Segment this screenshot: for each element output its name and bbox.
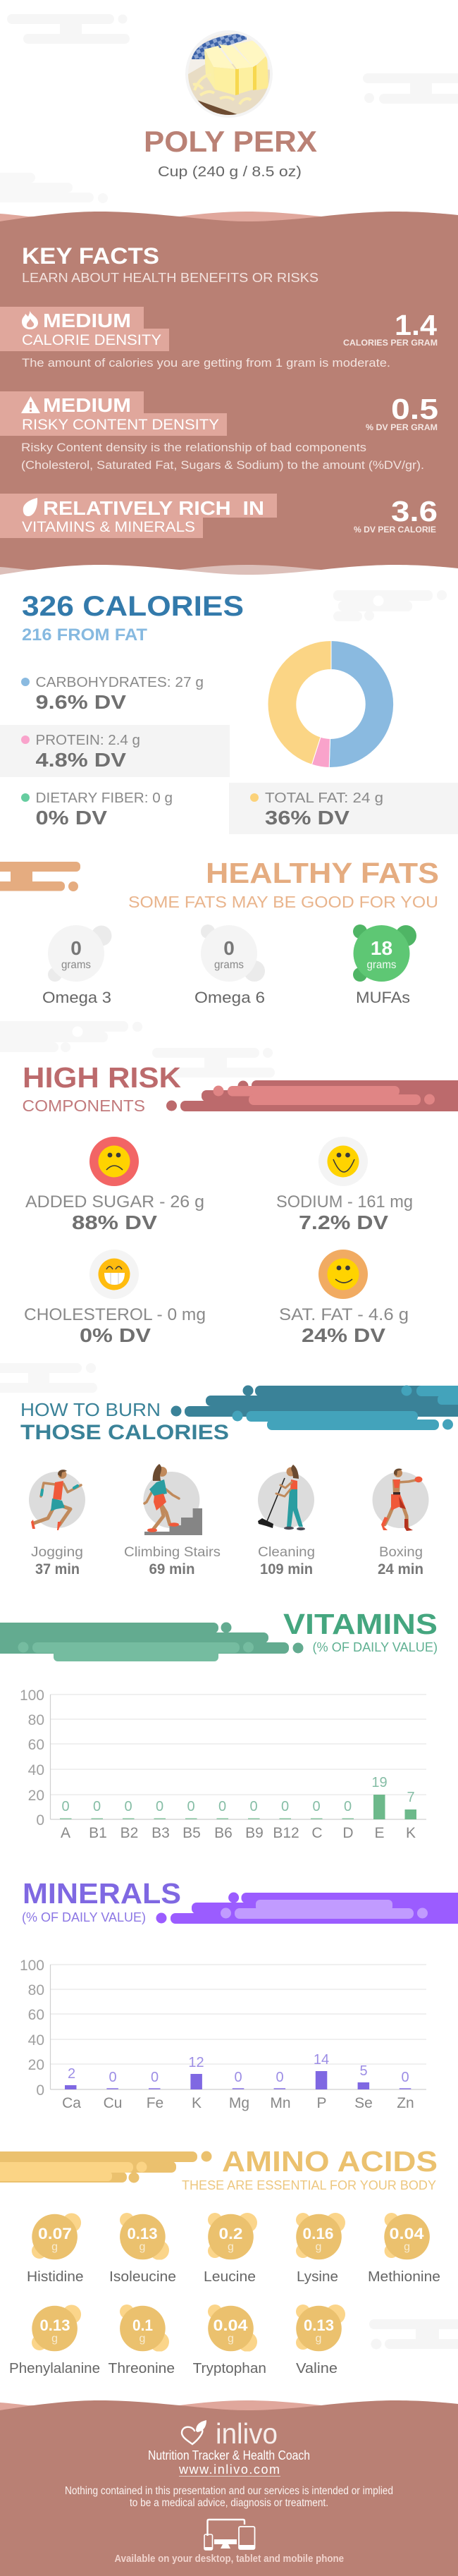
availability note: Available on your desktop, tablet and mobile phone — [114, 2553, 344, 2565]
amino acid: tryptophan — [193, 2305, 266, 2376]
subheading: minerals daily value: (% OF DAILY VALUE) — [22, 1910, 146, 1924]
background cloud: above high risk left — [0, 1021, 142, 1052]
bar chart: minerals: 12 — [188, 2055, 204, 2070]
amino acid: methionine — [368, 2213, 440, 2285]
amino acid: leucine: g — [228, 2241, 234, 2253]
macro: total fat: 36% DV — [265, 807, 349, 829]
macro: carbohydrates — [21, 675, 204, 713]
amino acid: valine: 0.13 — [304, 2316, 334, 2334]
amino acid: lysine — [296, 2213, 345, 2285]
bar chart: vitamins: 20 — [28, 1788, 44, 1804]
decoration: minerals stripes — [156, 1893, 458, 1924]
fact: risky content density: % DV PER GRAM — [366, 422, 438, 432]
serving size: Cup (240 g / 8.5 oz) — [158, 164, 302, 180]
amino acid: isoleucine: 0.13 — [127, 2225, 158, 2242]
activity: climbing stairs: Climbing Stairs — [124, 1545, 221, 1560]
bar chart: minerals: 80 — [28, 1982, 44, 1998]
fat badge: MUFAs: 18 — [371, 937, 392, 959]
bar chart: vitamins: 0 — [312, 1799, 321, 1814]
component: cholesterol: 0% DV — [80, 1324, 151, 1346]
macro: total fat: TOTAL FAT: 24 g — [265, 790, 383, 806]
bar chart: minerals: 2 — [68, 2066, 75, 2082]
panel: key facts — [0, 212, 458, 593]
bar chart: vitamins: B5 — [182, 1825, 201, 1841]
bar chart: minerals: 0 — [36, 2082, 44, 2099]
component: sodium: 7.2% DV — [299, 1211, 388, 1233]
macro: protein: PROTEIN: 2.4 g — [35, 733, 140, 748]
fact: vitamins and minerals: 3.6 — [391, 495, 438, 527]
bar chart: vitamins: 80 — [28, 1712, 44, 1728]
bar chart: vitamins: A — [61, 1825, 70, 1841]
disclaimer: Nothing contained in this presentation and our services is intended or implied — [65, 2485, 393, 2497]
bar chart: vitamins: B6 — [214, 1825, 233, 1841]
fact: calorie density: CALORIE DENSITY — [22, 332, 161, 348]
bar chart: minerals: 5 — [359, 2063, 368, 2079]
fact: calorie density: MEDIUM — [43, 310, 131, 331]
disclaimer — [65, 2485, 393, 2509]
bar chart: vitamins: 19 — [371, 1775, 388, 1790]
bar chart: vitamins: B9 — [245, 1825, 264, 1841]
bar chart: minerals: 0 — [234, 2070, 242, 2085]
activity: boxing — [372, 1468, 428, 1577]
amino acid: phenylalanine: Phenylalanine — [9, 2361, 100, 2376]
donut chart — [268, 640, 394, 768]
amino acid: tryptophan: g — [228, 2333, 234, 2345]
website link: www.inlivo.com — [178, 2462, 280, 2477]
bar chart: minerals: Fe — [147, 2095, 163, 2111]
macro: total fat — [229, 783, 458, 834]
bar chart: minerals: 100 — [20, 1958, 44, 1974]
bar chart: minerals: 60 — [28, 2007, 44, 2023]
bar chart: vitamins: 40 — [28, 1762, 44, 1778]
decoration: high risk stripes — [166, 1080, 458, 1111]
bar chart: minerals — [20, 1958, 426, 2111]
bar chart: vitamins: E — [374, 1825, 385, 1841]
fact: risky content density: MEDIUM — [43, 394, 131, 416]
amino acid: valine: g — [316, 2333, 321, 2345]
component: added sugar — [25, 1137, 204, 1233]
background cloud: above burn section — [0, 1363, 97, 1393]
bar chart: minerals: 40 — [28, 2032, 44, 2049]
fact: vitamins and minerals: RELATIVELY RICH IN — [43, 497, 264, 519]
heading: healthy fats: HEALTHY FATS — [206, 857, 439, 889]
bar chart: vitamins: B1 — [89, 1825, 107, 1841]
bar chart: minerals: 0 — [401, 2070, 409, 2085]
component: sodium: SODIUM - 161 mg — [276, 1192, 413, 1211]
amino acid: leucine — [204, 2213, 257, 2285]
amino acid: histidine: 0.07 — [38, 2225, 72, 2242]
fat badge: omega 6: 0 — [223, 937, 235, 959]
heading: calories: 326 CALORIES — [22, 591, 244, 622]
amino acid: threonine: g — [140, 2333, 145, 2345]
component: cholesterol: CHOLESTEROL - 0 mg — [24, 1305, 206, 1324]
background cloud: above high risk center — [152, 1048, 275, 1078]
bar chart: vitamins: 0 — [249, 1799, 258, 1814]
bar chart: minerals: 0 — [109, 2070, 117, 2085]
amino acid: isoleucine: Isoleucine — [109, 2269, 176, 2285]
amino acid: methionine: 0.04 — [389, 2225, 424, 2242]
amino acid: valine: Valine — [296, 2361, 338, 2376]
bar chart: minerals: K — [192, 2095, 202, 2111]
amino acid: tryptophan: 0.04 — [213, 2316, 248, 2334]
fact: calorie density — [0, 307, 438, 370]
amino acid: phenylalanine: g — [51, 2333, 58, 2345]
bar chart: vitamins: B3 — [151, 1825, 170, 1841]
amino acid: methionine: g — [404, 2241, 410, 2253]
bar chart: vitamins: 60 — [28, 1737, 44, 1753]
component: added sugar: ADDED SUGAR - 26 g — [25, 1192, 204, 1211]
fat badge: omega 6: Omega 6 — [194, 989, 265, 1006]
activity: climbing stairs: 69 min — [149, 1561, 194, 1577]
bar chart: vitamins: 0 — [36, 1812, 44, 1829]
fat badge: omega 3: 0 — [70, 937, 82, 959]
bar chart: minerals: Se — [354, 2095, 373, 2111]
bar chart: vitamins: D — [342, 1825, 354, 1841]
icon: devices — [204, 2520, 255, 2550]
subheading: key facts: LEARN ABOUT HEALTH BENEFITS OR RISKS — [22, 270, 318, 285]
fat badge: MUFAs: grams — [366, 959, 397, 971]
activity: boxing: 24 min — [378, 1561, 423, 1577]
fact: calorie density: 1.4 — [395, 309, 437, 341]
fact: risky content density: (Cholesterol, Saturated Fat, Sugars & Sodium) to the amount (%DV/gr). — [21, 458, 424, 472]
amino acid: histidine: g — [51, 2241, 58, 2253]
bar chart: vitamins: 0 — [218, 1799, 226, 1814]
macro: protein: 4.8% DV — [35, 749, 126, 771]
decoration: healthy fats stripes — [0, 862, 80, 891]
fat badge: omega 3: Omega 3 — [42, 989, 111, 1006]
fact: vitamins and minerals: % DV PER CALORIE — [354, 525, 436, 535]
logo: inlivo — [182, 2417, 278, 2450]
activity: jogging: Jogging — [31, 1545, 83, 1560]
heading: key facts: KEY FACTS — [22, 243, 159, 269]
fat badge: omega 3 — [42, 925, 111, 1006]
bar chart: vitamins: K — [406, 1825, 416, 1841]
amino acid: threonine: 0.1 — [132, 2316, 153, 2334]
fact: calorie density: The amount of calories you are getting from 1 gram is moderate. — [22, 356, 390, 370]
amino acid: histidine — [27, 2213, 84, 2285]
amino acid: methionine: Methionine — [368, 2269, 440, 2285]
activity: climbing stairs — [124, 1464, 221, 1577]
subheading: calories from fat: 216 FROM FAT — [22, 625, 147, 645]
subheading: healthy fats: SOME FATS MAY BE GOOD FOR YOU — [128, 893, 438, 911]
bar chart: vitamins: B12 — [273, 1825, 299, 1841]
fact: risky content density: RISKY CONTENT DENSITY — [22, 417, 219, 433]
bar chart: vitamins: 100 — [20, 1687, 44, 1704]
amino acid: isoleucine — [109, 2213, 176, 2285]
amino acid: leucine: Leucine — [204, 2269, 256, 2285]
amino acid: lysine: Lysine — [297, 2269, 338, 2285]
fact: risky content density: 0.5 — [391, 393, 438, 425]
amino acid: phenylalanine — [9, 2305, 100, 2376]
amino acid: threonine: Threonine — [109, 2361, 175, 2376]
fat badge: MUFAs: MUFAs — [356, 989, 410, 1006]
bar chart: vitamins: 0 — [61, 1799, 70, 1814]
macro: protein — [0, 725, 230, 777]
subheading: amino acids: THESE ARE ESSENTIAL FOR YOUR BODY — [182, 2178, 436, 2192]
component: cholesterol — [24, 1250, 206, 1346]
background cloud: calories — [333, 590, 447, 621]
heading: amino acids: AMINO ACIDS — [222, 2145, 438, 2178]
panel: how to burn those calories — [20, 1399, 428, 1577]
macro: dietary fiber: DIETARY FIBER: 0 g — [35, 790, 173, 806]
subheading: vitamins daily value: (% OF DAILY VALUE) — [313, 1640, 438, 1654]
title: POLY PERX — [144, 125, 317, 158]
bar chart: vitamins: 7 — [407, 1790, 415, 1805]
bar chart: minerals: Mg — [229, 2095, 249, 2111]
amino acid: phenylalanine: 0.13 — [39, 2316, 70, 2334]
heading: how to burn: HOW TO BURN — [20, 1399, 161, 1420]
fact: calorie density: CALORIES PER GRAM — [343, 338, 438, 348]
amino acid: valine — [296, 2305, 345, 2376]
background cloud: right of amino row — [369, 2319, 458, 2350]
amino acid: lysine: 0.16 — [303, 2225, 334, 2242]
logo: inlivo: inlivo — [216, 2417, 278, 2450]
icon: warning triangle — [21, 396, 40, 413]
activity: cleaning — [258, 1465, 315, 1577]
bar chart: vitamins: 0 — [187, 1799, 195, 1814]
fat badge: omega 3: grams — [61, 959, 91, 971]
amino acid: leucine: 0.2 — [218, 2225, 242, 2242]
background cloud: top left — [7, 14, 130, 44]
component: saturated fat — [279, 1250, 409, 1346]
fact: risky content density — [0, 391, 438, 472]
bar chart: vitamins — [20, 1687, 426, 1841]
amino acid: tryptophan: Tryptophan — [193, 2361, 266, 2376]
bar chart: minerals: Cu — [104, 2095, 122, 2111]
bar chart: vitamins: 0 — [344, 1799, 352, 1814]
panel: high risk components — [23, 1061, 413, 1346]
macro: carbohydrates: CARBOHYDRATES: 27 g — [35, 675, 204, 690]
activity: boxing: Boxing — [379, 1545, 423, 1560]
macro: carbohydrates: 9.6% DV — [35, 691, 126, 713]
fat badge: omega 6: grams — [214, 959, 244, 971]
bar chart: minerals: P — [316, 2095, 327, 2111]
fact: vitamins and minerals: VITAMINS & MINERALS — [22, 519, 195, 535]
icon: leaf — [23, 498, 37, 516]
heading: high risk: HIGH RISK — [23, 1061, 181, 1094]
food photo: butter — [185, 30, 273, 118]
bar chart: minerals: 20 — [28, 2057, 44, 2073]
component: saturated fat: SAT. FAT - 4.6 g — [279, 1305, 409, 1324]
decoration: burn stripes — [171, 1385, 458, 1430]
bar chart: vitamins: 0 — [124, 1799, 132, 1814]
amino acid: histidine: Histidine — [27, 2269, 84, 2285]
bar chart: vitamins: 0 — [281, 1799, 289, 1814]
component: added sugar: 88% DV — [72, 1211, 157, 1233]
bar chart: minerals: 0 — [276, 2070, 284, 2085]
component: saturated fat: 24% DV — [302, 1324, 385, 1346]
bar chart: minerals: 0 — [151, 2070, 159, 2085]
bar chart: vitamins: 0 — [93, 1799, 101, 1814]
background cloud: left of band — [0, 173, 108, 203]
subheading: components: COMPONENTS — [23, 1097, 145, 1115]
icon: flame — [22, 310, 38, 329]
component: sodium — [276, 1137, 413, 1233]
disclaimer: to be a medical advice, diagnosis or treatment. — [130, 2497, 328, 2509]
tagline: Nutrition Tracker & Health Coach — [148, 2448, 310, 2462]
fat badge: omega 6 — [194, 924, 265, 1006]
fact: risky content density: Risky Content density is the relationship of bad components — [21, 441, 366, 454]
amino acid: isoleucine: g — [140, 2241, 145, 2253]
decoration: vitamins stripes — [0, 1622, 303, 1661]
bar chart: minerals: Ca — [62, 2095, 81, 2111]
activity: jogging: 37 min — [35, 1561, 80, 1577]
bar chart: vitamins: C — [311, 1825, 323, 1841]
heading: vitamins: VITAMINS — [283, 1608, 438, 1640]
fat badge: MUFAs — [353, 924, 416, 1006]
bar chart: vitamins: 0 — [156, 1799, 163, 1814]
background cloud: top right — [363, 73, 458, 104]
activity: cleaning: Cleaning — [258, 1545, 315, 1560]
panel: footer — [0, 2400, 458, 2576]
activity: jogging — [29, 1470, 85, 1577]
fact: vitamins and minerals — [0, 494, 438, 538]
panel: healthy fats — [42, 857, 439, 1006]
bar chart: minerals: Zn — [397, 2095, 414, 2111]
amino acid: lysine: g — [316, 2241, 321, 2253]
bar chart: vitamins: B2 — [120, 1825, 138, 1841]
heading: minerals: MINERALS — [23, 1877, 181, 1910]
macro: dietary fiber — [21, 790, 173, 829]
macro: dietary fiber: 0% DV — [35, 807, 107, 829]
bar chart: minerals: Mn — [270, 2095, 291, 2111]
amino acid: threonine — [109, 2305, 175, 2376]
panel: calories — [0, 591, 458, 834]
heading: those calories: THOSE CALORIES — [20, 1421, 229, 1444]
activity: cleaning: 109 min — [260, 1561, 313, 1577]
bar chart: minerals: 14 — [314, 2052, 329, 2068]
decoration: amino acids stripes — [0, 2151, 211, 2183]
